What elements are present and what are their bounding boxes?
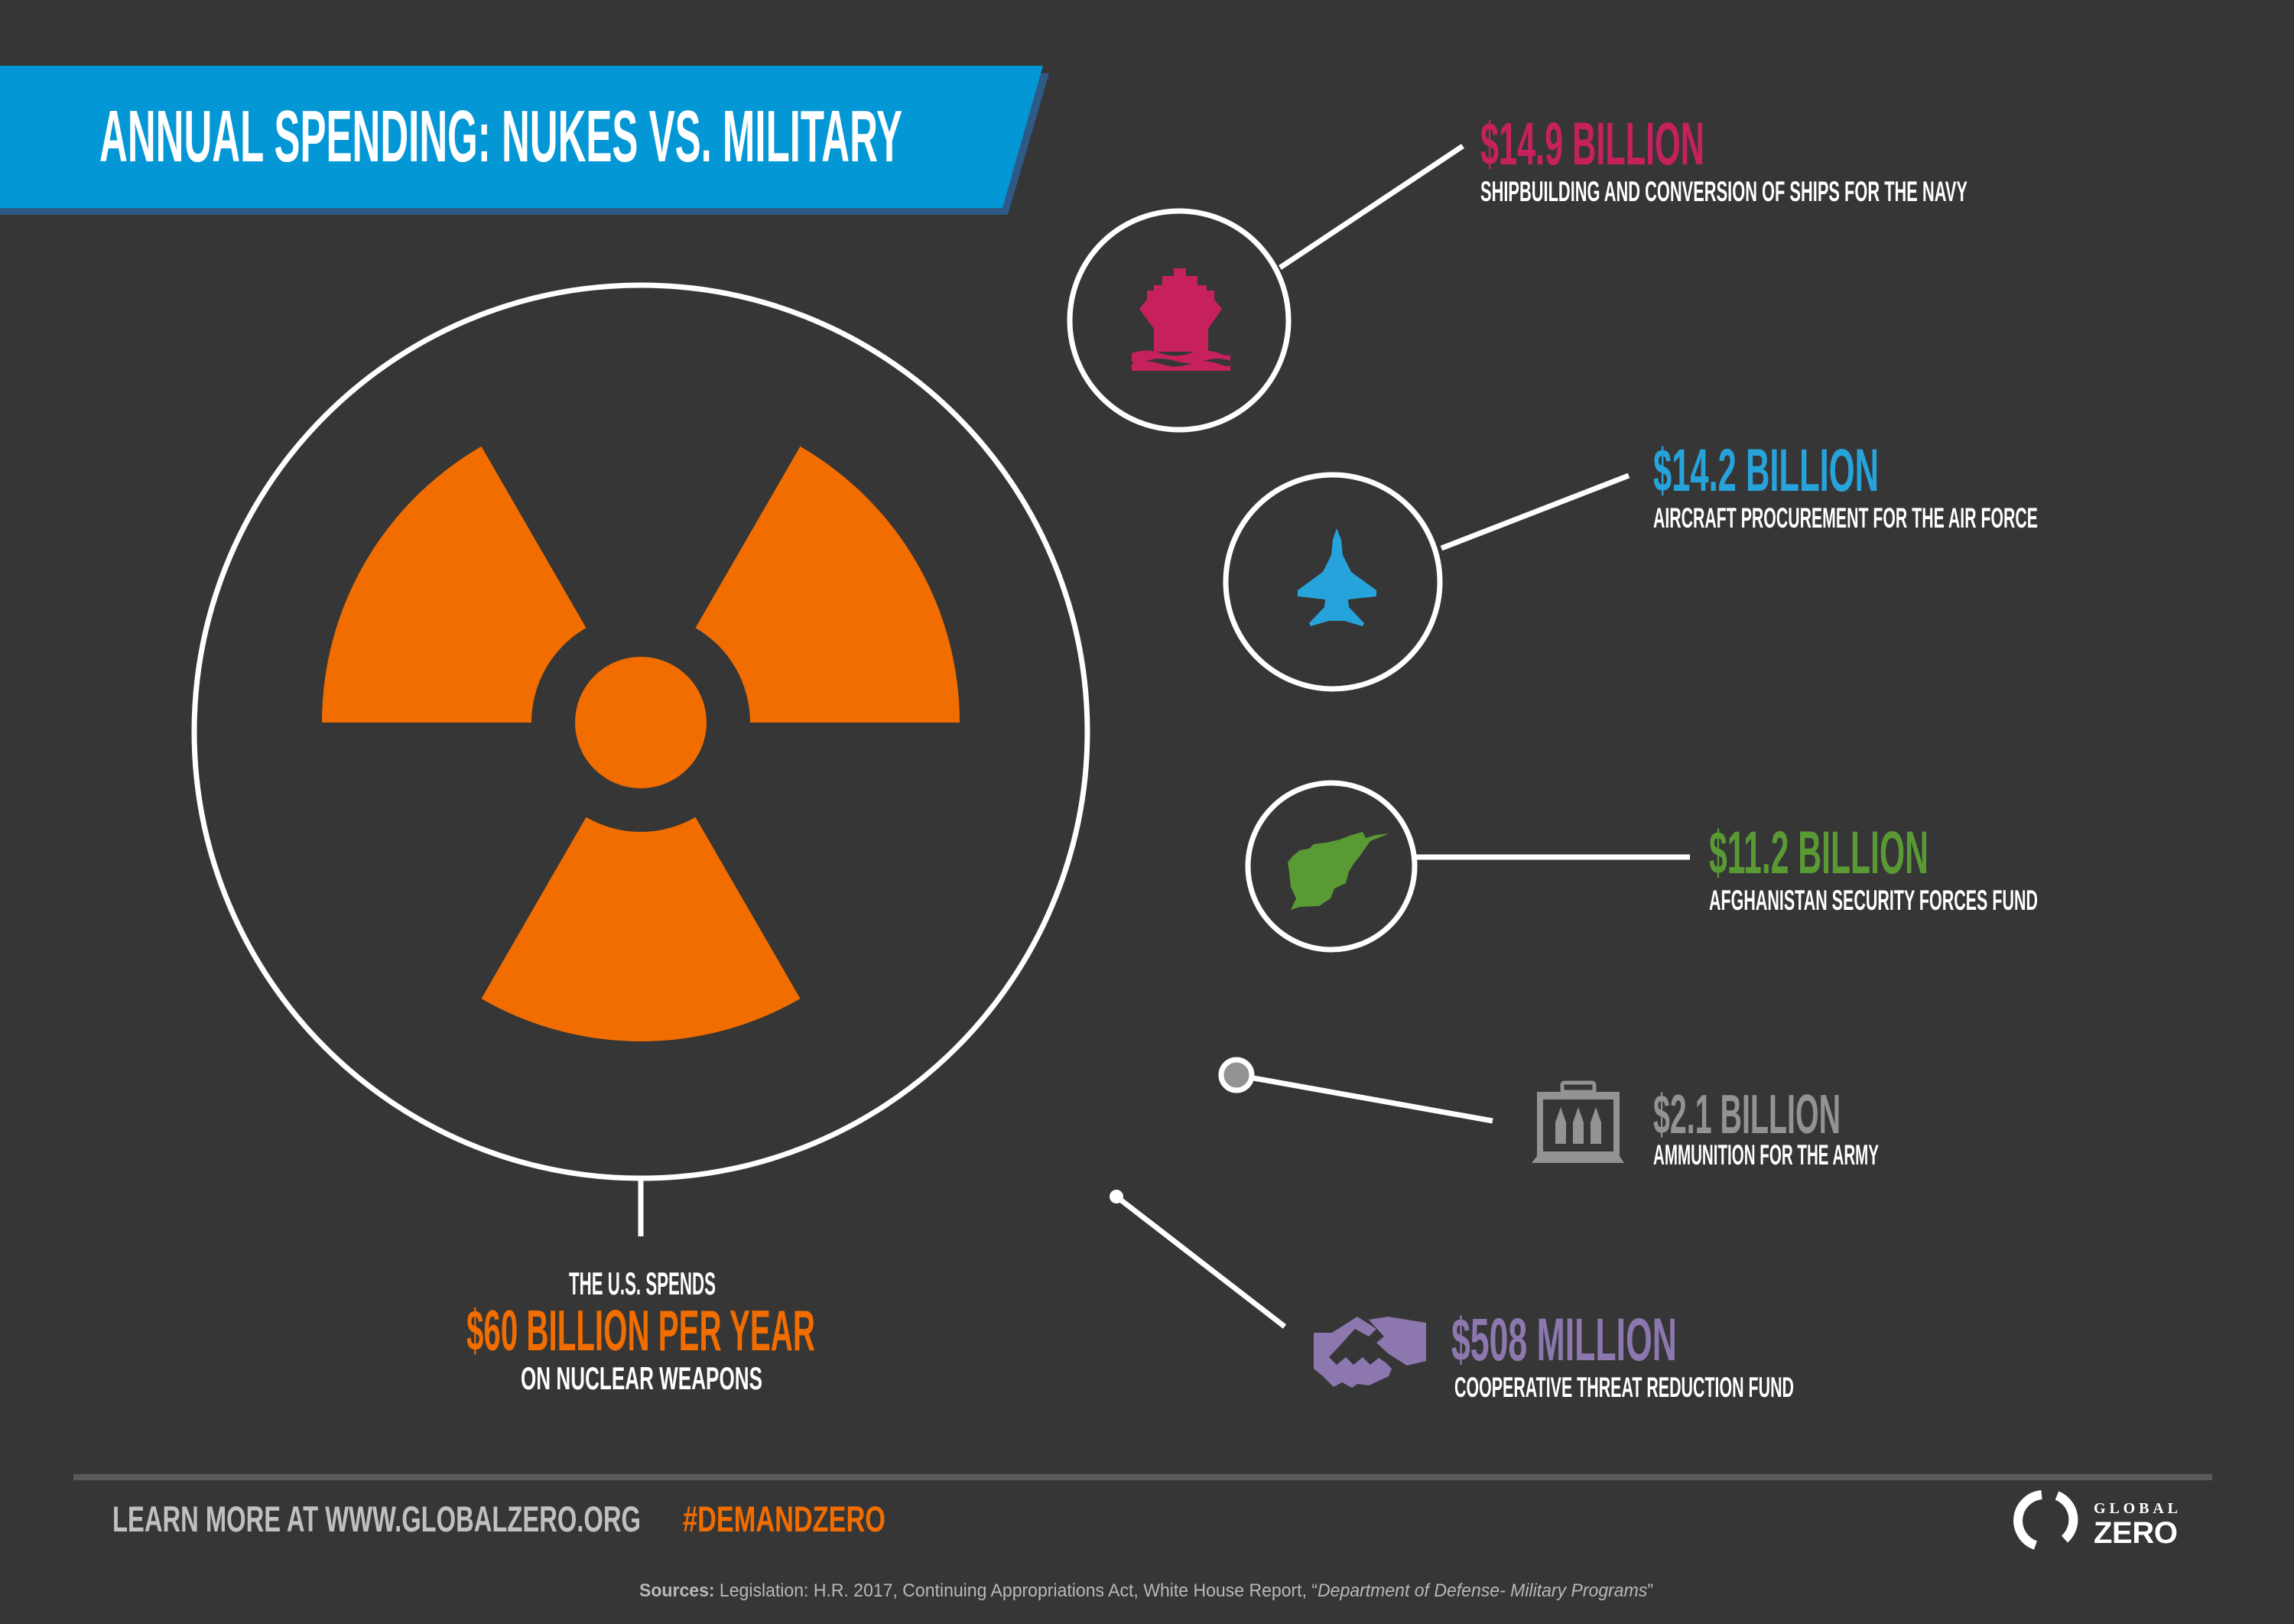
nuclear spending text: $60 BILLION PER YEAR — [466, 1298, 815, 1363]
icon: ammo box — [1532, 1083, 1624, 1163]
footer call to action: LEARN MORE AT WWW.GLOBALZERO.ORG — [112, 1499, 641, 1539]
icon: ship — [1132, 268, 1230, 371]
icon: handshake — [1314, 1317, 1426, 1388]
icon: afghanistan map — [1288, 832, 1389, 910]
nuclear spending text: ON NUCLEAR WEAPONS — [521, 1360, 762, 1396]
item: air force aircraft: $14.2 BILLION — [1653, 436, 1879, 504]
icon: radiation trefoil — [322, 447, 960, 1041]
title banner — [0, 66, 1049, 215]
title: ANNUAL SPENDING: NUKES VS. MILITARY — [99, 96, 902, 177]
item: cooperative threat reduction: COOPERATIVE THREAT REDUCTION FUND — [1454, 1372, 1794, 1403]
sources: Sources: Legislation: H.R. 2017, Continuing Appropriations Act, White House Report, “Department of Defense- Military Programs” — [639, 1580, 1653, 1601]
logo: global zero: GLOBAL — [2094, 1500, 2178, 1517]
item: navy ships: $14.9 BILLION — [1480, 109, 1704, 177]
item: navy ships: SHIPBUILDING AND CONVERSION OF SHIPS FOR THE NAVY — [1480, 176, 1967, 207]
item: navy ships — [1070, 109, 1967, 430]
icon: jet — [1298, 528, 1376, 626]
item: air force aircraft — [1226, 436, 2038, 689]
item: army ammunition: $2.1 BILLION — [1653, 1084, 1841, 1145]
item: cooperative threat reduction: $508 MILLION — [1451, 1305, 1677, 1373]
item: cooperative threat reduction — [1110, 1190, 1794, 1403]
stem line — [638, 1177, 644, 1236]
logo: global zero — [2018, 1495, 2178, 1550]
big circle with radiation symbol — [194, 285, 1087, 1178]
nuclear spending text — [466, 1265, 815, 1396]
item: army ammunition — [1221, 1060, 1879, 1171]
nuclear spending text: THE U.S. SPENDS — [569, 1265, 716, 1301]
item: afghanistan: $11.2 BILLION — [1709, 818, 1928, 886]
logo: global zero: ZERO — [2094, 1516, 2178, 1550]
item: afghanistan — [1248, 783, 2038, 950]
footer call to action: #DEMANDZERO — [683, 1499, 885, 1539]
item: afghanistan: AFGHANISTAN SECURITY FORCES FUND — [1709, 885, 2038, 916]
item: army ammunition: AMMUNITION FOR THE ARMY — [1653, 1139, 1879, 1171]
